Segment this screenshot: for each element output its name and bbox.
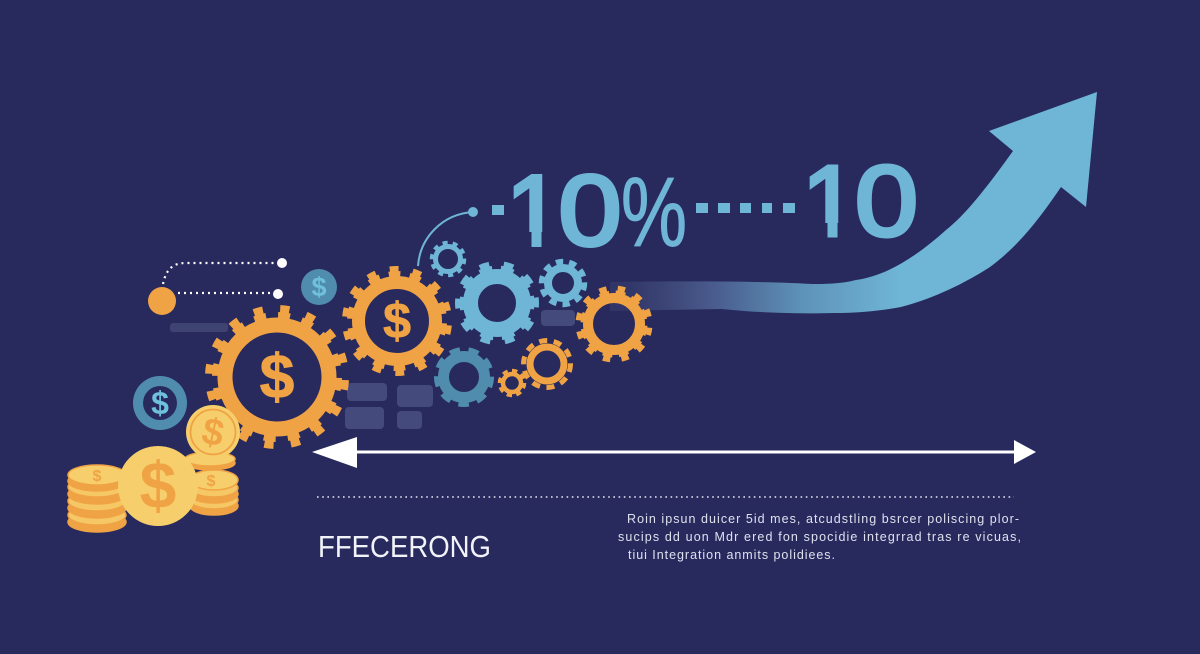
- small blue dollar badge: $: [311, 272, 327, 302]
- coin stack right: [185, 452, 238, 515]
- heading: FFECERONG: [318, 529, 491, 564]
- small gold coin: [186, 405, 240, 459]
- tiny orange gear: [500, 370, 524, 396]
- blue gear medium: [542, 262, 584, 304]
- large orange dollar gear: $: [260, 343, 294, 412]
- blue gear small top: [432, 243, 464, 275]
- large orange dollar gear: [206, 306, 348, 448]
- blue dollar badge: $: [151, 385, 169, 421]
- curved connector with node: [418, 207, 478, 266]
- percentage value: [506, 155, 687, 267]
- blue dollar badge: [133, 376, 187, 430]
- percentage value: 0: [558, 155, 622, 267]
- orange dollar gear: [341, 265, 453, 377]
- coin stack left: $: [93, 468, 102, 485]
- percentage value: %: [621, 157, 687, 267]
- coin stack left: [68, 465, 126, 532]
- body text: sucips dd uon Mdr ered fon spocidie integrrad tras re vicuas,: [618, 530, 1021, 544]
- body text: tiui Integration anmits polidiees.: [628, 548, 835, 562]
- double-headed white arrow: [312, 437, 1036, 468]
- target value: 1: [802, 146, 858, 258]
- dotted connector: [696, 203, 795, 213]
- large gold coin: [118, 446, 198, 526]
- percentage value: 1: [506, 155, 562, 267]
- orange gear right: [575, 285, 653, 363]
- orange node: [148, 287, 176, 315]
- body text: Roin ipsun duicer 5id mes, atcudstling bsrcer poliscing plor-: [627, 512, 1019, 526]
- placeholder bar: [170, 323, 228, 332]
- placeholder blocks: [345, 310, 575, 429]
- large gold coin: $: [140, 448, 176, 522]
- leading square dot: [492, 205, 504, 215]
- orange dollar gear: $: [383, 293, 411, 349]
- dark blue gear: [437, 350, 491, 404]
- small blue dollar badge: [301, 269, 337, 305]
- growth arrow: [610, 92, 1097, 313]
- blue gear large: [452, 258, 542, 348]
- body text: [618, 512, 1021, 562]
- small orange gear: [524, 340, 570, 388]
- target value: [802, 146, 918, 258]
- target value: 0: [855, 146, 918, 258]
- small gold coin: $: [198, 410, 227, 456]
- dotted network lines: [163, 258, 287, 299]
- dotted divider: [317, 496, 1014, 498]
- coin stack right: $: [207, 473, 216, 490]
